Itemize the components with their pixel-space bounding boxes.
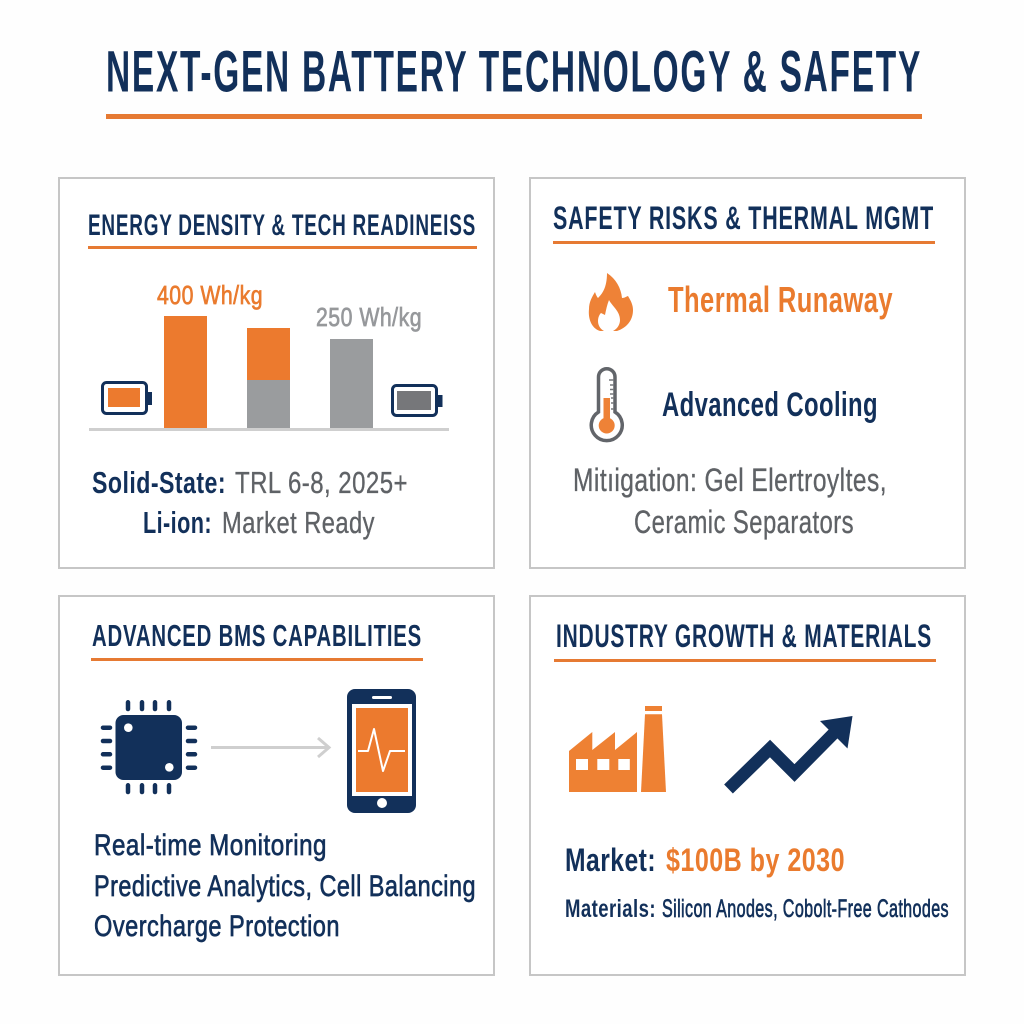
label: 400 Wh/kg: 400 Wh/kg bbox=[157, 280, 263, 310]
icon: flame bbox=[589, 273, 633, 331]
text: BMS capabilities: Real-time Monitoring bbox=[94, 829, 327, 862]
icon: chip bbox=[103, 702, 195, 792]
bar: solid-state bbox=[164, 316, 207, 429]
bar: transition bbox=[247, 328, 290, 429]
text: market: Market: bbox=[565, 842, 656, 878]
bar chart: energy density bbox=[89, 280, 449, 431]
panel: safety risks and thermal management bbox=[530, 178, 965, 568]
label: thermal runaway: Thermal Runaway bbox=[668, 279, 893, 320]
label: advanced cooling: Advanced Cooling bbox=[662, 386, 878, 424]
bar: li-ion bbox=[330, 339, 373, 429]
panel: energy density and tech readiness bbox=[59, 178, 494, 568]
text: readiness summary: TRL 6-8, 2025+ bbox=[235, 465, 408, 500]
icon: grey battery bbox=[392, 386, 442, 416]
text: mitigation: Ceramic Separators bbox=[634, 504, 854, 540]
text: readiness summary: Solid-State: bbox=[92, 465, 226, 500]
icon: phone bbox=[347, 689, 416, 813]
text: BMS capabilities bbox=[94, 829, 476, 943]
text: BMS capabilities: Predictive Analytics, Cell Balancing bbox=[94, 870, 476, 903]
heading: BMS: ADVANCED BMS CAPABILITIES bbox=[92, 618, 422, 653]
text: BMS capabilities: Overcharge Protection bbox=[94, 910, 340, 943]
text: market bbox=[565, 842, 845, 878]
text: market: $100B by 2030 bbox=[666, 842, 845, 878]
text: mitigation bbox=[573, 462, 887, 540]
icon: orange battery bbox=[102, 382, 152, 414]
icon: growth arrow bbox=[728, 716, 852, 789]
panel: industry growth and materials bbox=[530, 596, 965, 975]
text: mitigation: Mitıigation: Gel Elertroyltes, bbox=[573, 462, 887, 498]
heading: energy density: ENERGY DENSITY & TECH READINEISS bbox=[88, 209, 476, 242]
text: materials: Materials: bbox=[565, 895, 656, 923]
text: materials bbox=[565, 895, 949, 923]
text: readiness summary: Market Ready bbox=[222, 505, 375, 540]
arrow: chip to phone bbox=[211, 738, 329, 757]
icon: factory bbox=[569, 706, 666, 792]
label: 250 Wh/kg: 250 Wh/kg bbox=[316, 302, 422, 332]
heading: safety risks bbox=[553, 200, 935, 244]
text: readiness summary: Li-ion: bbox=[143, 505, 212, 540]
text: readiness summary bbox=[92, 465, 408, 540]
heading: BMS bbox=[91, 618, 423, 661]
panel: advanced BMS capabilities bbox=[59, 596, 494, 975]
heading: industry growth bbox=[554, 618, 936, 662]
icon: thermometer bbox=[591, 369, 622, 441]
heading: energy density bbox=[88, 209, 477, 249]
